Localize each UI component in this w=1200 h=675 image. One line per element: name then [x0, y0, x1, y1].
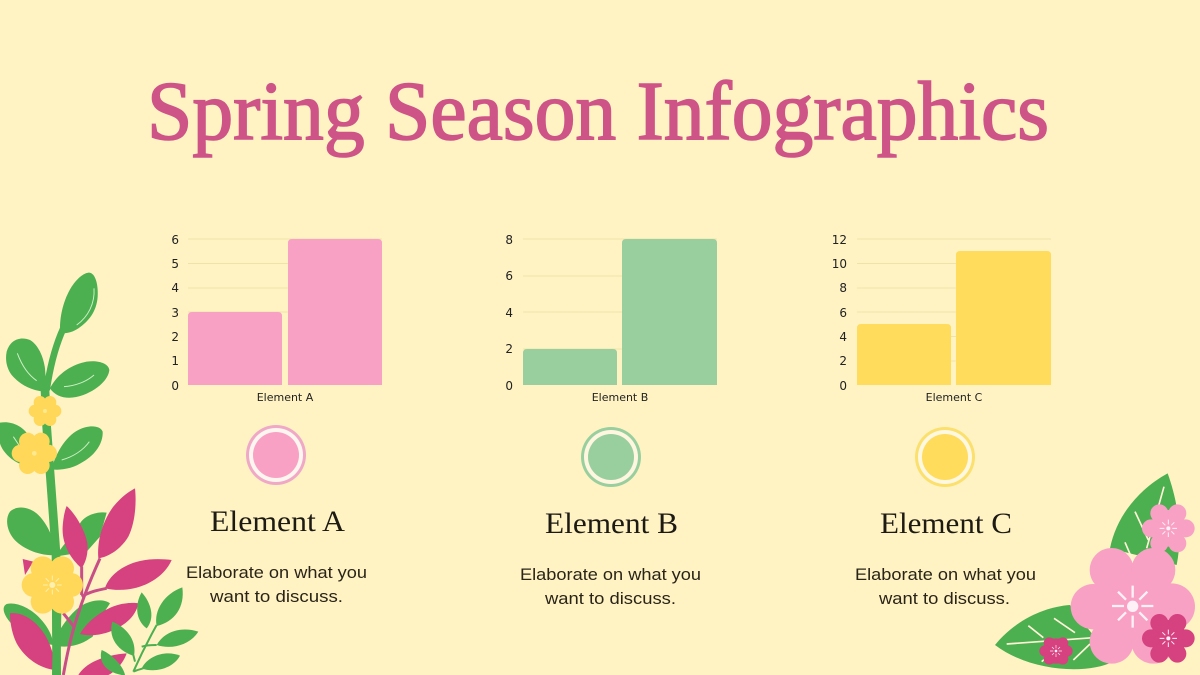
panel: element C [832, 233, 1051, 608]
icon: yellow flower small [29, 396, 61, 426]
bar chart: element B: Element B [592, 391, 648, 404]
bar chart: element B: 2 [505, 342, 513, 356]
icon: right floral cluster [995, 473, 1195, 669]
bar chart: element A: Element A [257, 391, 314, 404]
heading: element A: Element A [210, 505, 345, 538]
text block: element C: Elaborate on what you [855, 565, 1036, 584]
heading: element B: Element B [545, 507, 678, 540]
icon: left floral plant [0, 273, 198, 675]
text block: element A: want to discuss. [209, 587, 343, 606]
bar chart: element C: 12 [832, 233, 847, 247]
icon: green circle [581, 427, 641, 487]
icon: pink circle [246, 425, 306, 485]
title: Spring Season Infographics [147, 65, 1049, 158]
bar chart: element C [832, 233, 1051, 404]
text block: element B: Elaborate on what you [520, 565, 701, 584]
bar chart: element B: 8 [505, 233, 513, 247]
text block: element C: want to discuss. [878, 589, 1010, 608]
text block: element B [520, 565, 701, 608]
bar chart: element C: 10 [832, 257, 847, 271]
icon: dark pink flower [1142, 614, 1195, 663]
bar chart: element A: 1 [171, 354, 179, 368]
bar chart: element A: 0 [171, 379, 179, 393]
heading: element C: Element C [880, 507, 1012, 540]
icon: yellow flower large [22, 556, 83, 614]
bar chart: element A: 2 [171, 330, 179, 344]
icon: pink flower small [1142, 504, 1195, 552]
text block: element C [855, 565, 1036, 608]
bar chart: element B [505, 233, 717, 404]
bar chart: element C: 0 [839, 379, 847, 393]
bar chart: element B: 4 [505, 306, 513, 320]
bar chart: element A: 4 [171, 281, 179, 295]
icon: yellow circle [915, 427, 975, 487]
icon: small dark pink flower [1039, 637, 1073, 665]
bar chart: element C: Element C [926, 391, 983, 404]
panel: element B [505, 233, 717, 608]
bar chart: element C: 4 [839, 330, 847, 344]
icon: pink flower large [1071, 548, 1195, 664]
text block: element A: Elaborate on what you [186, 563, 367, 582]
bar chart: element A: 5 [171, 257, 179, 271]
bar chart: element A: 3 [171, 306, 179, 320]
icon: yellow flower medium [12, 433, 57, 474]
bar chart: element C: 8 [839, 281, 847, 295]
bar chart: element B: 0 [505, 379, 513, 393]
bar chart: element B: 6 [505, 269, 513, 283]
bar chart: element A [171, 233, 382, 404]
bar chart: element A: 6 [171, 233, 179, 247]
text block: element A [186, 563, 367, 606]
bar chart: element C: 6 [839, 306, 847, 320]
bar chart: element C: 2 [839, 354, 847, 368]
text block: element B: want to discuss. [544, 589, 676, 608]
panel: element A [171, 233, 382, 606]
